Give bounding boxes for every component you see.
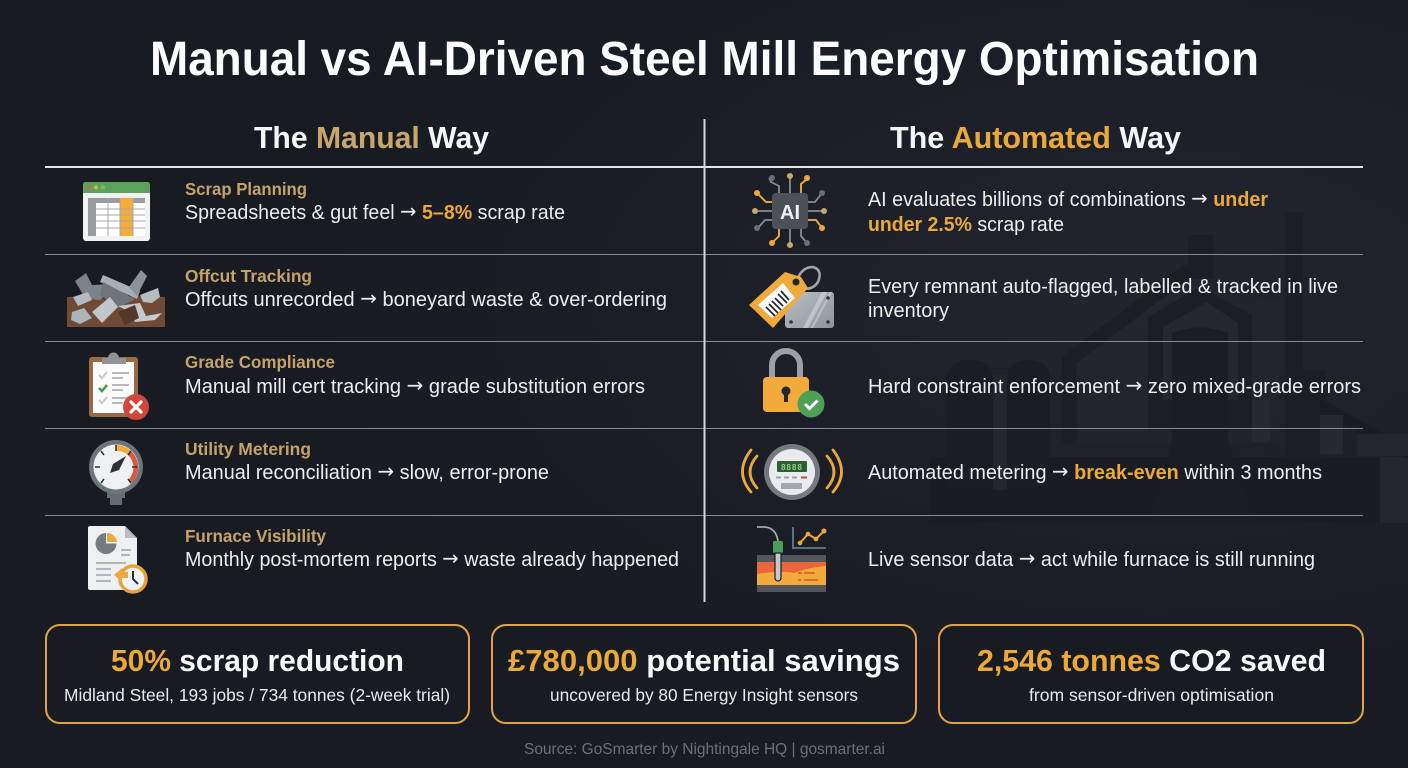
row text: scrap planning [185, 179, 565, 224]
row text: scrap planning: 5–8% scrap rate [422, 202, 567, 224]
stat card: scrap reduction: Midland Steel, 193 jobs / 734 tonnes (2-week trial) [64, 685, 450, 705]
row text: furnace visibility: Monthly post-mortem reports [185, 549, 441, 571]
row text: automated metering: break-even within 3 months [1074, 462, 1323, 484]
stat card: scrap reduction: 50% scrap reduction [111, 643, 404, 678]
icon: barcode tag on steel plate [749, 267, 834, 328]
icon: pressure gauge [89, 440, 143, 505]
row text: furnace visibility [185, 526, 679, 571]
icon: spreadsheet [83, 182, 150, 241]
icon: report with clock [88, 526, 146, 592]
row text: AI evaluation: AI evaluates billions of combinations [868, 189, 1190, 211]
row text: live sensor data: Live sensor data [868, 549, 1015, 571]
stat card: scrap reduction [46, 625, 469, 723]
row text: automated metering: → [1052, 459, 1069, 483]
row text: remnant tracking: Every remnant auto-flagged, labelled & tracked in live [868, 276, 1338, 298]
icon: AI chip: AI [780, 202, 800, 224]
row text: utility metering: slow, error-prone [400, 462, 550, 484]
row text: furnace visibility: → [442, 546, 459, 570]
column heading: manual: The Manual Way [254, 120, 490, 155]
icon: scrap pile [67, 270, 165, 327]
stat card: CO2 saved [939, 625, 1363, 723]
stat card: CO2 saved: 2,546 tonnes CO2 saved [977, 643, 1326, 678]
row text: constraint enforcement: zero mixed-grade errors [1148, 376, 1361, 398]
row text: utility metering: Utility Metering [185, 439, 311, 459]
icon: smart meter with signal waves: 8888 [781, 463, 803, 472]
row text: constraint enforcement: Hard constraint enforcement [868, 376, 1120, 398]
icon: AI chip [752, 173, 827, 248]
row text: scrap planning: Spreadsheets & gut feel [185, 202, 398, 224]
row text: offcut tracking: boneyard waste & over-ordering [383, 289, 667, 311]
row text: offcut tracking [185, 266, 667, 311]
row text: remnant tracking: inventory [868, 300, 949, 322]
row text: utility metering: → [377, 459, 394, 483]
row text: grade compliance: → [407, 373, 423, 397]
icon: furnace sensor with trend chart [757, 527, 826, 592]
row text: offcut tracking: Offcut Tracking [185, 266, 312, 286]
row text: grade compliance: Manual mill cert tracking [185, 376, 401, 398]
row text: furnace visibility: waste already happened [464, 549, 682, 571]
row text: grade compliance: grade substitution errors [429, 376, 645, 398]
row text: offcut tracking: Offcuts unrecorded [185, 289, 355, 311]
row text: AI evaluation: under 2.5% scrap rate [868, 214, 1064, 236]
stat card: potential savings: uncovered by 80 Energy Insight sensors [550, 685, 858, 705]
column heading: automated: The Automated Way [890, 120, 1182, 155]
icon: clipboard with error badge [89, 352, 149, 420]
row text: grade compliance [185, 352, 645, 398]
row text: AI evaluation: → [1191, 186, 1208, 210]
row text: live sensor data: act while furnace is still running [1041, 549, 1318, 571]
row text: AI evaluation: under [1213, 189, 1268, 211]
stat card: potential savings [492, 625, 916, 723]
title: Manual vs AI-Driven Steel Mill Energy Optimisation [150, 33, 1259, 86]
row text: utility metering: Manual reconciliation [185, 462, 373, 484]
row text: offcut tracking: → [360, 286, 377, 310]
row text: utility metering [185, 439, 549, 484]
stat card: CO2 saved: from sensor-driven optimisation [1029, 685, 1274, 705]
icon: padlock with check [763, 351, 824, 418]
source line: Source: GoSmarter by Nightingale HQ | gosmarter.ai [524, 741, 885, 758]
row text: AI evaluation [868, 186, 1268, 236]
row text: remnant tracking [868, 276, 1338, 322]
row text: furnace visibility: Furnace Visibility [185, 526, 326, 546]
row text: scrap planning: Scrap Planning [185, 179, 307, 199]
icon: smart meter with signal waves [742, 444, 842, 500]
row text: automated metering: Automated metering [868, 462, 1048, 484]
row text: grade compliance: Grade Compliance [185, 352, 335, 372]
stat card: potential savings: £780,000 potential savings [508, 643, 900, 678]
row text: live sensor data: → [1019, 546, 1035, 570]
row text: constraint enforcement: → [1126, 373, 1142, 397]
background: factory silhouette [930, 212, 1408, 523]
row text: scrap planning: → [400, 199, 417, 223]
